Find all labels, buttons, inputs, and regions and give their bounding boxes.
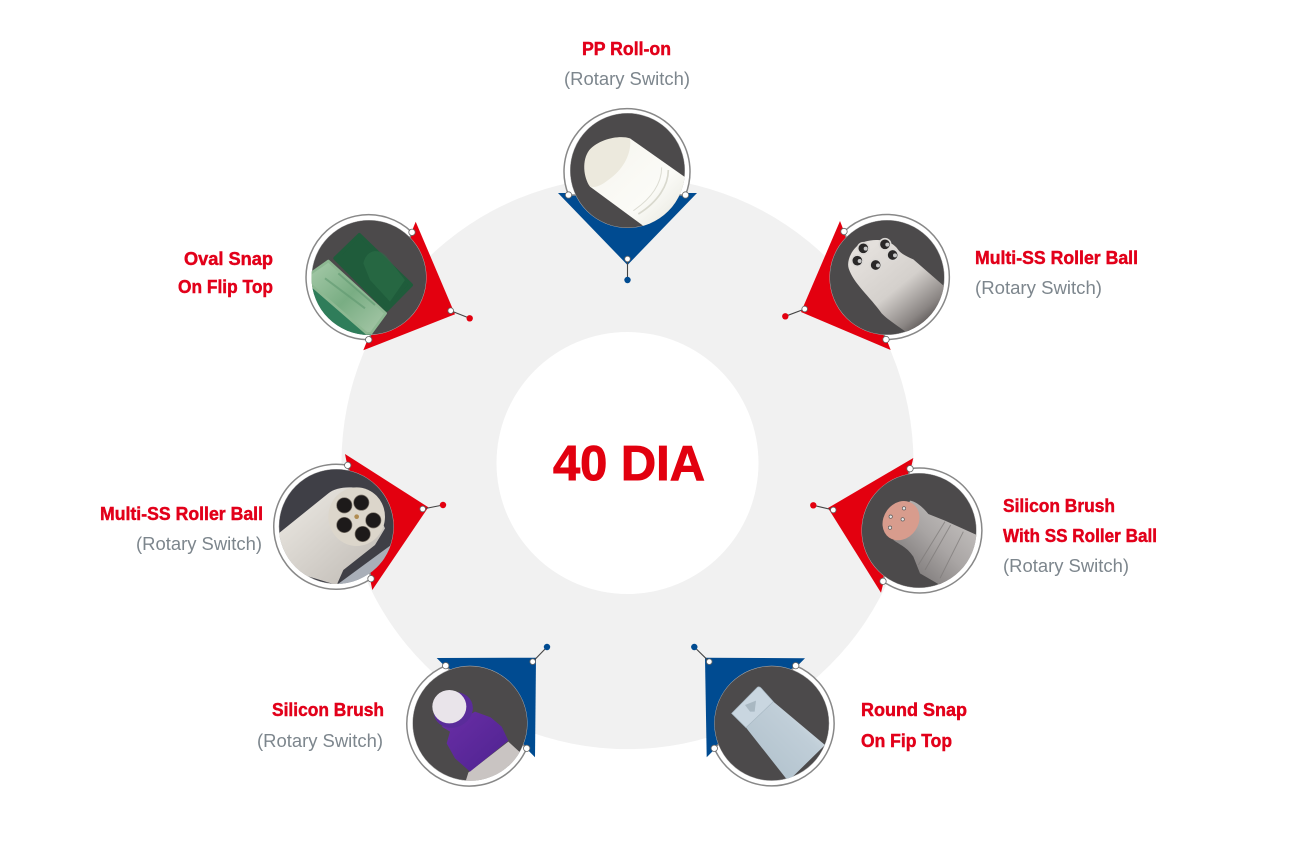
photo: green oval flip top bbox=[308, 220, 426, 338]
label: Oval Snap On Flip Top bbox=[178, 249, 273, 297]
infographic: 40 DIA applicator types bbox=[100, 41, 1156, 787]
label: Multi-SS Roller Ball right: Multi-SS Roller Ball bbox=[975, 248, 1138, 268]
label: Silicon Brush With SS Roller Ball: (Rotary Switch) bbox=[1003, 556, 1129, 576]
ring arc bbox=[844, 215, 949, 340]
connector and markers bbox=[810, 466, 913, 584]
connector and markers bbox=[691, 644, 799, 752]
pointer: blue triangle bbox=[437, 658, 536, 757]
pointer: red triangle bbox=[801, 221, 891, 350]
item: Multi-SS Roller Ball right bbox=[782, 215, 949, 350]
photo: silicon brush with balls bbox=[862, 473, 980, 588]
label: Multi-SS Roller Ball right bbox=[975, 248, 1138, 298]
connector and markers bbox=[344, 462, 446, 582]
item: Round Snap On Flip Top bbox=[691, 644, 834, 786]
photo: flip top tube bbox=[714, 666, 829, 781]
label: Silicon Brush bbox=[257, 700, 384, 751]
label: Round Snap On Fip Top: On Fip Top bbox=[861, 731, 952, 751]
label: PP Roll-on bbox=[564, 39, 690, 89]
donut background bbox=[342, 177, 914, 749]
label: PP Roll-on: (Rotary Switch) bbox=[564, 69, 690, 89]
label: Multi-SS Roller Ball right: (Rotary Switch) bbox=[975, 278, 1102, 298]
item: Silicon Brush with SS Roller Ball bbox=[810, 458, 982, 593]
pointer: red triangle bbox=[345, 454, 428, 590]
photo: six ball applicator bbox=[277, 469, 397, 588]
pointer: red triangle bbox=[363, 222, 455, 350]
pointer: blue triangle bbox=[558, 193, 697, 265]
item: Silicon Brush bbox=[407, 644, 550, 786]
photo: purple silicon brush bbox=[412, 666, 528, 783]
label: Silicon Brush: (Rotary Switch) bbox=[257, 731, 383, 751]
connector and markers bbox=[565, 192, 689, 283]
ring arc bbox=[714, 666, 834, 786]
label: Silicon Brush: Silicon Brush bbox=[272, 700, 384, 720]
label: Round Snap On Fip Top bbox=[861, 700, 967, 751]
label: Multi-SS Roller Ball left: (Rotary Switch) bbox=[136, 534, 262, 554]
ring arc bbox=[274, 464, 371, 589]
label: Multi-SS Roller Ball left: Multi-SS Roller Ball bbox=[100, 504, 263, 524]
connector and markers bbox=[782, 228, 889, 343]
ring arc bbox=[306, 215, 412, 340]
connector and markers bbox=[366, 229, 473, 343]
ring arc bbox=[883, 468, 982, 593]
label: Oval Snap On Flip Top: On Flip Top bbox=[178, 277, 273, 297]
center title: 40 DIA bbox=[553, 437, 705, 491]
label: Multi-SS Roller Ball left bbox=[100, 504, 263, 554]
item: Multi-SS Roller Ball left bbox=[274, 454, 446, 590]
ring arc bbox=[407, 666, 527, 786]
photo: PP roll-on cap bbox=[570, 113, 687, 233]
label: Oval Snap On Flip Top: Oval Snap bbox=[184, 249, 273, 269]
label: Round Snap On Fip Top: Round Snap bbox=[861, 700, 967, 720]
ring arc bbox=[564, 109, 690, 195]
label: PP Roll-on: PP Roll-on bbox=[582, 39, 671, 59]
label: Silicon Brush With SS Roller Ball: With SS Roller Ball bbox=[1003, 526, 1157, 546]
label: Silicon Brush With SS Roller Ball bbox=[1003, 496, 1157, 576]
item: PP Roll-on bbox=[558, 109, 697, 283]
pointer: red triangle bbox=[828, 458, 913, 593]
connector and markers bbox=[442, 644, 550, 752]
pointer: blue triangle bbox=[705, 658, 805, 757]
photo: multi ball applicator bbox=[830, 220, 947, 335]
item: Oval Snap On Flip Top bbox=[306, 215, 473, 350]
label: Silicon Brush With SS Roller Ball: Silicon Brush bbox=[1003, 496, 1115, 516]
